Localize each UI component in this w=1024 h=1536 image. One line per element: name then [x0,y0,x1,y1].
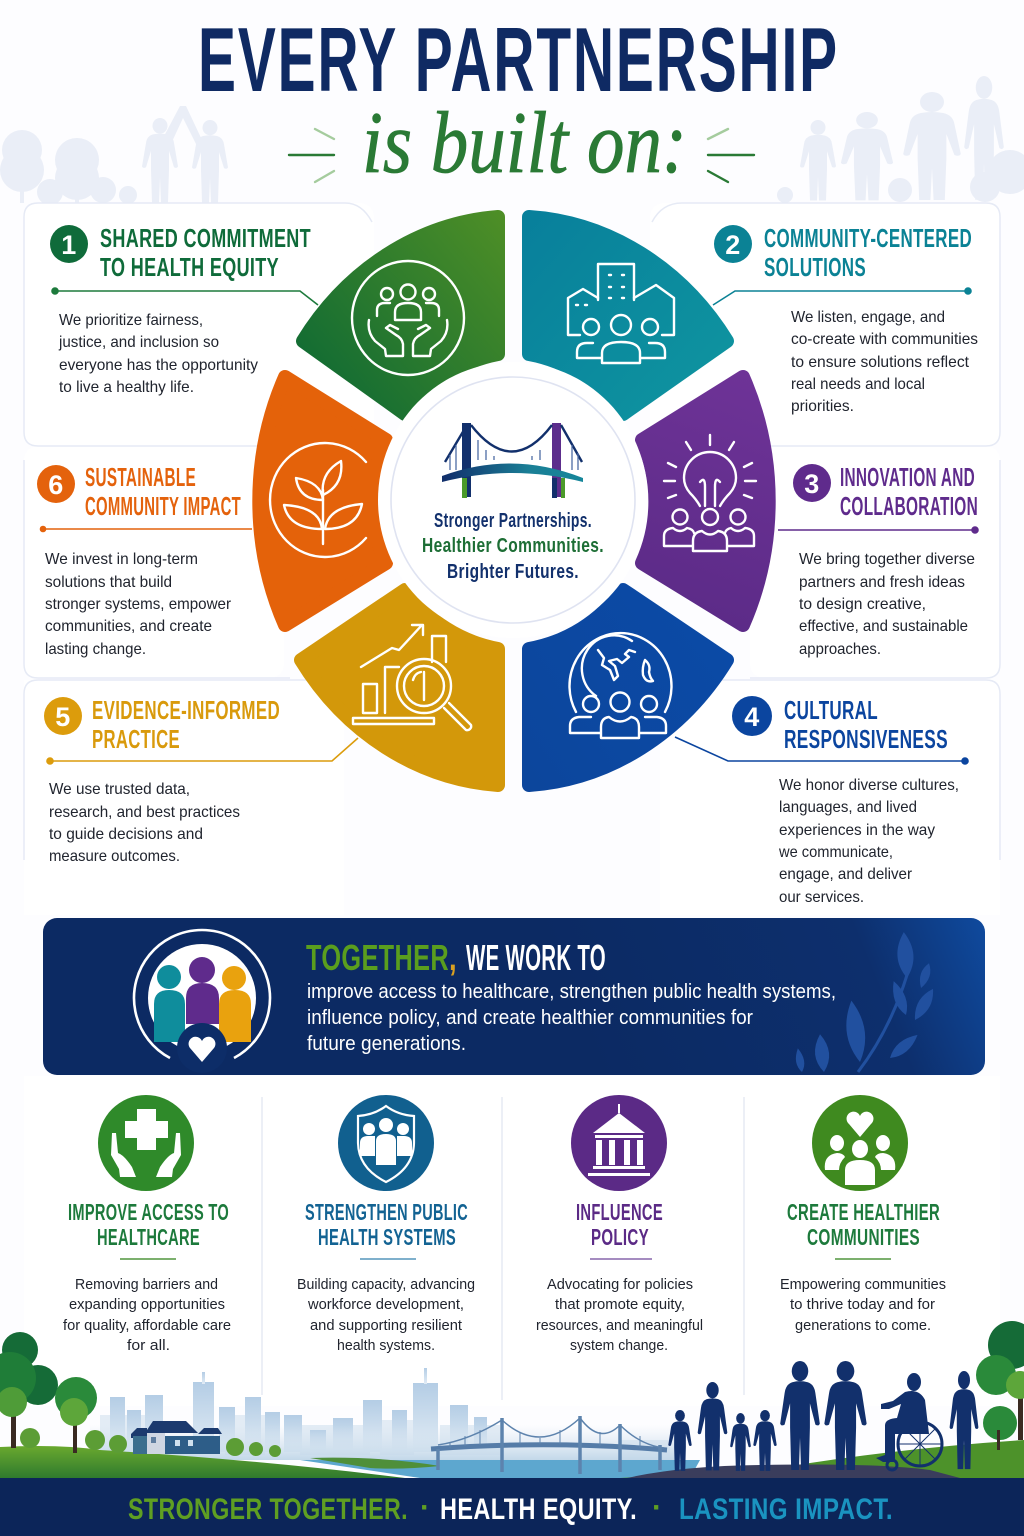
heading 2 [764,223,972,282]
heading 6 [85,462,241,521]
text: expanding opportunities [69,1296,225,1313]
city skyline [110,1368,487,1452]
text [63,1276,231,1354]
segment 3 purple [642,377,769,625]
text [780,1276,946,1334]
text: generations to come. [795,1317,931,1334]
wheelchair user [876,1373,942,1470]
number badge 3: 3 [804,469,820,499]
center tagline: Healthier Communities. [422,535,604,557]
body 4: languages, and lived [779,799,917,816]
left tall tree [0,1332,58,1448]
number badge 4: 4 [744,702,760,732]
heading: POLICY [591,1224,649,1250]
text: workforce development, [307,1296,464,1313]
body 1: We prioritize fairness, [59,312,203,329]
lower section panel [24,1076,1000,1406]
icon: community emblem [134,930,270,1073]
subtitle script: is built on: [362,95,687,192]
footer tagline: · [652,1491,662,1524]
body 5: measure outcomes. [49,848,180,865]
body 3: effective, and sustainable [799,618,968,635]
number badge 6: 6 [48,470,64,500]
banner heading [306,937,606,978]
left ground [0,1446,405,1478]
heading 4 [784,695,948,754]
text: and supporting resilient [310,1317,463,1334]
column 2: strengthen systems [297,1095,475,1354]
connector 1 [52,288,318,305]
footer band [0,1478,1024,1536]
icon: people in caring hands [352,261,464,375]
body 2 [791,309,978,415]
number badge 1: 1 [61,230,77,260]
heading 5: PRACTICE [92,724,180,754]
number badge 6 [37,465,75,503]
segment 1 green [303,217,498,414]
text: Advocating for policies [547,1276,693,1293]
connector 3 [778,527,978,533]
heading 4: RESPONSIVENESS [784,724,948,754]
body 1: to live a healthy life. [59,379,194,396]
heading 1: TO HEALTH EQUITY [100,252,279,282]
body 4: we communicate, [778,844,893,861]
card 3: innovation [778,462,978,658]
together banner [43,918,985,1075]
heading: INFLUENCE [576,1199,663,1225]
far bank [310,1458,440,1469]
bridge [431,1416,667,1474]
number badge 2 [714,225,752,263]
heading 5: EVIDENCE-INFORMED [92,695,280,725]
body 2: real needs and local [791,376,925,393]
column 3: influence policy [536,1095,703,1354]
icon: light bulb and team [664,435,756,551]
text [297,1276,475,1354]
body 3: We bring together diverse [799,551,975,568]
bridge logo [442,423,583,498]
heading 6: SUSTAINABLE [85,462,196,492]
body 6 [45,551,232,658]
connector 4 [675,737,968,764]
heading 2: SOLUTIONS [764,252,866,282]
center tagline: Stronger Partnerships. [434,510,592,532]
footer tagline [128,1491,893,1526]
connector 2 [713,288,971,305]
body 2: priorities. [791,398,854,415]
card backgrounds [24,203,1000,915]
card 2: community-centered [713,223,978,415]
text [536,1276,703,1354]
card 5: evidence-informed [44,695,358,865]
underline [835,1258,891,1260]
underline [590,1258,652,1260]
right trees [976,1321,1024,1450]
body 3 [799,551,975,658]
body 6: lasting change. [45,641,146,658]
number badge 5 [44,697,82,735]
icon: civic building [571,1095,667,1191]
house [131,1421,222,1454]
body 6: stronger systems, empower [45,596,232,613]
banner heading: , [449,937,457,978]
center tagline: Brighter Futures. [447,561,579,583]
center hub [378,362,648,638]
segment 4 blue [529,590,727,785]
icon: cross in hands [98,1095,194,1191]
segment 2 teal [529,217,727,414]
underline [120,1258,176,1260]
body 2: We listen, engage, and [791,309,945,326]
column dividers [262,1097,744,1400]
body 3: partners and fresh ideas [799,574,965,591]
wheel [259,217,769,785]
heading [787,1199,940,1250]
card 1: shared commitment [50,223,318,396]
body 4: We honor diverse cultures, [779,777,959,794]
connector 5 [47,738,358,764]
heading 1 [100,223,311,282]
river [300,1460,700,1478]
family silhouettes [668,1361,978,1471]
number badge 2: 2 [725,230,741,260]
connector 6 [40,526,252,532]
subtitle rays [289,129,754,182]
icon: globe and people [570,633,672,738]
heading 4: CULTURAL [784,695,878,725]
segment 5 gold [301,590,498,785]
body 1: justice, and inclusion so [58,334,219,351]
footer tagline: LASTING IMPACT. [679,1493,893,1526]
icon: heart and people [812,1095,908,1191]
body 5: to guide decisions and [49,826,203,843]
text: that promote equity, [555,1296,685,1313]
center tagline [422,510,604,583]
heading: HEALTHCARE [97,1224,200,1250]
number badge 1 [50,225,88,263]
haze [90,1425,680,1460]
body 3: approaches. [799,641,881,658]
heading [305,1199,468,1250]
body 4 [778,777,959,906]
heading 1: SHARED COMMITMENT [100,223,311,253]
segment 6 orange [259,377,386,625]
column 4: healthier communities [780,1095,946,1334]
body 4: engage, and deliver [779,866,913,883]
text: for quality, affordable care [63,1317,231,1334]
banner heading: WE WORK TO [466,937,606,978]
icon: growing sprout [270,443,366,557]
heading 3 [840,462,978,521]
footer tagline: STRONGER TOGETHER. [128,1493,408,1526]
path [627,1465,960,1478]
body 4: our services. [779,889,864,906]
icon: chart and magnifier [353,625,471,730]
footer tagline: · [420,1491,430,1524]
background silhouettes: trees and families [0,76,1024,205]
heading [576,1199,663,1250]
banner text: future generations. [307,1033,466,1055]
body 1 [58,312,258,396]
heading: STRENGTHEN PUBLIC [305,1199,468,1225]
number badge 5: 5 [55,702,71,732]
left small tree [55,1377,97,1453]
heading: IMPROVE ACCESS TO [68,1199,229,1225]
body 5: research, and best practices [49,804,240,821]
heading: COMMUNITIES [807,1224,920,1250]
body 2: co-create with communities [791,331,978,348]
column 1: improve access [63,1095,231,1354]
heading 5 [92,695,280,754]
body 3: to design creative, [799,596,926,613]
text: system change. [570,1337,668,1354]
number badge 4 [732,696,772,736]
underline [360,1258,416,1260]
footer tagline: HEALTH EQUITY. [440,1493,637,1526]
card 6: sustainable impact [37,462,252,658]
body 6: communities, and create [45,618,212,635]
text: Removing barriers and [75,1276,218,1293]
body 6: solutions that build [45,574,172,591]
banner text: improve access to healthcare, strengthen public health systems, [307,981,836,1003]
heading: CREATE HEALTHIER [787,1199,940,1225]
text: resources, and meaningful [536,1317,703,1334]
body 5 [49,781,240,865]
distant pale buildings [100,1415,670,1460]
right ground [620,1440,1024,1478]
text: Empowering communities [780,1276,946,1293]
banner heading: TOGETHER [306,937,449,978]
small bushes [20,1428,281,1457]
decorative leaves [794,932,938,1073]
text: for all. [127,1337,170,1354]
body 4: experiences in the way [779,822,935,839]
heading: HEALTH SYSTEMS [318,1224,456,1250]
body 1: everyone has the opportunity [59,357,258,374]
text: to thrive today and for [790,1296,935,1313]
number badge 3 [793,464,831,502]
text: health systems. [337,1337,435,1354]
banner text: influence policy, and create healthier communities for [307,1007,753,1029]
heading [68,1199,229,1250]
landscape illustration [0,1321,1024,1478]
heading 6: COMMUNITY IMPACT [85,491,241,521]
icon: shield with people [338,1095,434,1191]
card 4: cultural responsiveness [675,695,968,906]
body 5: We use trusted data, [49,781,190,798]
banner text [307,981,836,1055]
text: Building capacity, advancing [297,1276,475,1293]
icon: city and community [568,264,674,363]
body 6: We invest in long-term [45,551,198,568]
body 2: to ensure solutions reflect [791,354,970,371]
